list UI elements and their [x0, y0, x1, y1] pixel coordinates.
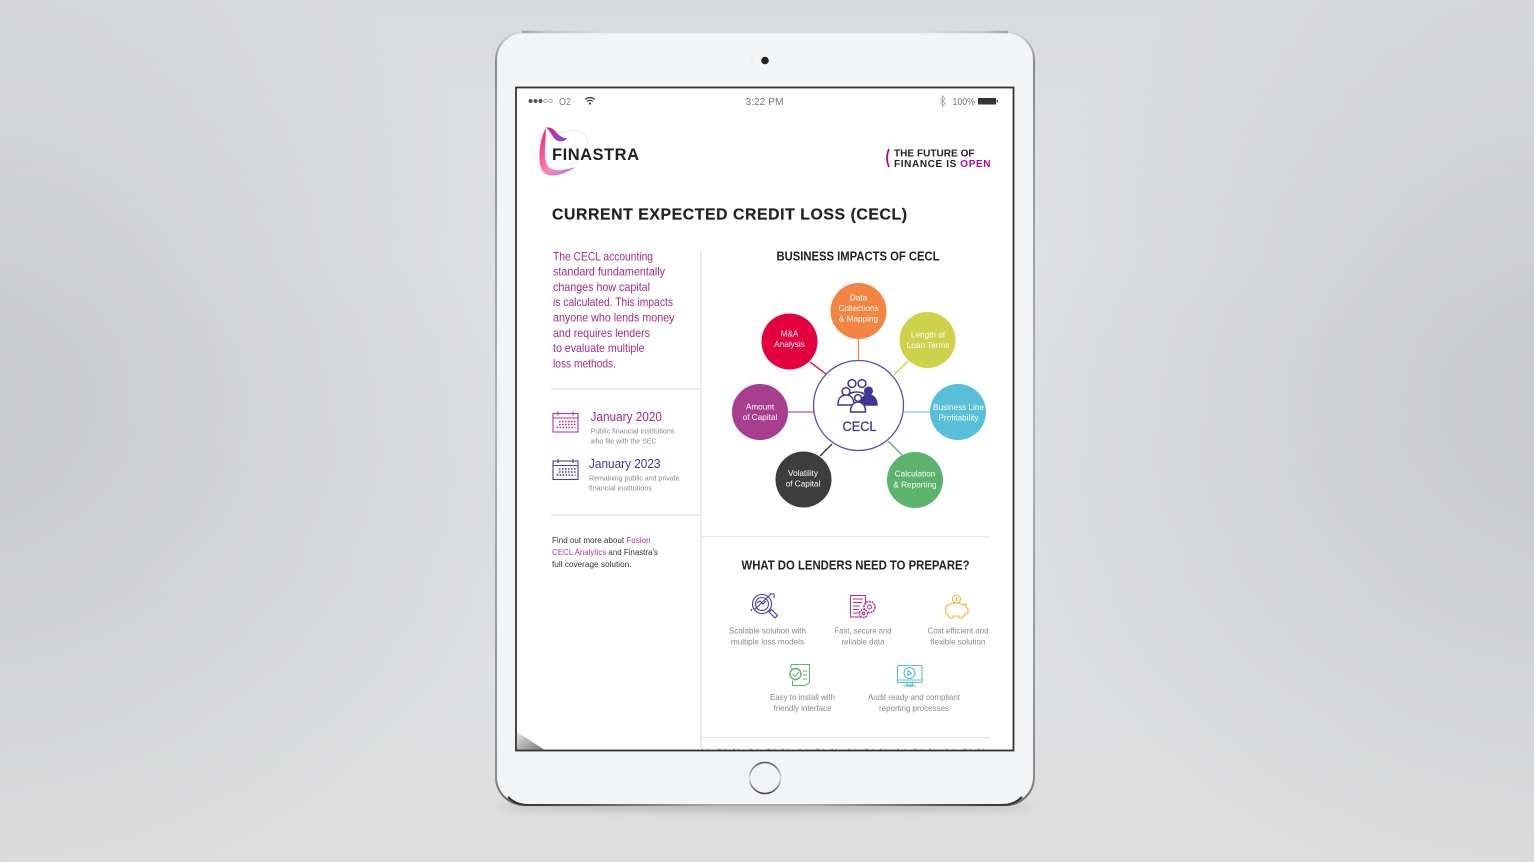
- date 2023: [589, 457, 680, 492]
- logo: [539, 127, 639, 176]
- call to action: Find out more about Fusion: [552, 536, 650, 545]
- tagline: THE FUTURE OF: [894, 148, 974, 160]
- node: length of loan terms: [900, 312, 956, 368]
- icon: calendar 2023: [553, 459, 578, 480]
- item: cost efficient: [928, 595, 989, 646]
- call to action: [552, 536, 658, 569]
- item: fast secure data: reliable data: [842, 638, 885, 646]
- node: business line profitability: [930, 384, 986, 440]
- icon: calendar 2020: [553, 412, 578, 432]
- date 2023: January 2023: [589, 457, 661, 471]
- icon: document and gears: [850, 596, 875, 618]
- node: data collections: [830, 283, 886, 339]
- screen: [516, 88, 1014, 750]
- item: scalable solution: [729, 594, 806, 646]
- item: audit ready: Audit ready and compliant: [868, 693, 961, 702]
- node: data collections: Collections: [838, 304, 879, 313]
- date 2023: Remaining public and private: [589, 474, 680, 482]
- intro text: changes how capital: [553, 280, 650, 294]
- intro text: is calculated. This impacts: [553, 295, 673, 309]
- node: M&A analysis: [762, 314, 818, 370]
- node: volatility of capital: [776, 452, 832, 508]
- node: M&A analysis: M&A: [781, 330, 799, 338]
- icon: checklist document: [790, 664, 810, 686]
- logo: FINASTRA: [552, 146, 639, 164]
- icon: people: [838, 380, 877, 412]
- item: cost efficient: Cost efficient and: [928, 626, 989, 636]
- intro text: and requires lenders: [553, 326, 650, 340]
- node: amount of capital: Amount: [746, 402, 775, 412]
- item: fast secure data: [834, 596, 892, 646]
- intro text: standard fundamentally: [553, 264, 665, 278]
- node: calculation and reporting: Calculation: [895, 470, 936, 478]
- dividers: [551, 250, 990, 750]
- intro text: loss methods.: [553, 356, 616, 370]
- icon: piggy bank: [946, 595, 968, 618]
- home button: [750, 762, 780, 794]
- item: easy to install: [770, 664, 835, 713]
- title: CURRENT EXPECTED CREDIT LOSS (CECL): [552, 206, 907, 224]
- intro text: anyone who lends money: [553, 310, 675, 324]
- node: length of loan terms: Length of: [911, 330, 946, 340]
- node: calculation and reporting: [887, 452, 943, 508]
- item: audit ready: reporting processes: [879, 704, 949, 713]
- item: audit ready: [868, 666, 961, 713]
- heading: lenders prepare: WHAT DO LENDERS NEED TO PREPARE?: [742, 558, 970, 572]
- date 2020: Public financial institutions: [590, 426, 675, 436]
- heading: business impacts: BUSINESS IMPACTS OF CECL: [776, 250, 940, 264]
- status bar: 3:22 PM: [746, 96, 784, 108]
- tablet device: [496, 32, 1034, 811]
- page curl: [517, 732, 544, 750]
- status bar: O2: [559, 96, 571, 108]
- item: fast secure data: Fast, secure and: [834, 626, 892, 636]
- tagline: FINANCE IS OPEN: [894, 159, 990, 170]
- status bar: [528, 96, 998, 108]
- node: data collections: & Mapping: [839, 314, 879, 324]
- icon: monitor with play: [898, 666, 922, 686]
- intro text: [553, 250, 675, 370]
- clipped body text: [701, 748, 985, 750]
- center node: CECL: [814, 360, 904, 450]
- intro text: The CECL accounting: [553, 250, 653, 264]
- connectors: [788, 339, 930, 456]
- date 2023: financial institutions: [589, 484, 652, 492]
- node: data collections: Data: [850, 294, 868, 302]
- center node: CECL: CECL: [842, 418, 877, 434]
- call to action: full coverage solution.: [552, 560, 632, 569]
- icon: magnifier: [751, 594, 778, 618]
- tagline: [887, 148, 990, 170]
- call to action: CECL Analytics and Finastra’s: [552, 548, 658, 557]
- node: M&A analysis: Analysis: [774, 340, 805, 349]
- node: business line profitability: Business Line: [933, 403, 984, 412]
- item: scalable solution: Scalable solution with: [729, 626, 806, 636]
- node: amount of capital: of Capital: [743, 413, 777, 422]
- node: volatility of capital: of Capital: [786, 480, 820, 488]
- item: scalable solution: multiple loss models: [731, 638, 804, 646]
- node: length of loan terms: Loan Terms: [907, 341, 949, 350]
- node: calculation and reporting: & Reporting: [893, 480, 937, 490]
- date 2020: January 2020: [590, 410, 662, 424]
- node: volatility of capital: Volatility: [788, 469, 819, 478]
- node: amount of capital: [732, 384, 788, 440]
- node: business line profitability: Profitability: [938, 414, 979, 422]
- item: easy to install: friendly interface: [774, 704, 832, 713]
- item: cost efficient: flexible solution: [930, 638, 986, 646]
- intro text: to evaluate multiple: [553, 341, 645, 355]
- date 2020: who file with the SEC: [590, 436, 656, 446]
- date 2020: [590, 410, 675, 446]
- item: easy to install: Easy to install with: [770, 693, 835, 702]
- camera: [750, 57, 769, 64]
- status bar: 100%: [952, 96, 975, 108]
